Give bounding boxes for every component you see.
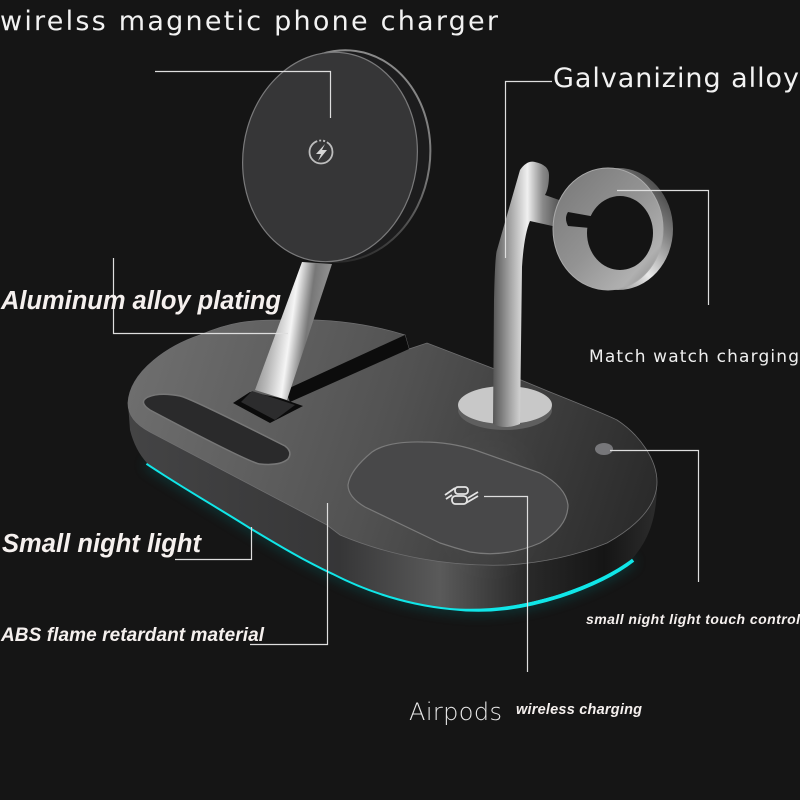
label: airpods: Airpods xyxy=(409,698,502,726)
label: small night light: Small night light xyxy=(2,530,202,558)
base side wall xyxy=(128,400,657,609)
night light strip xyxy=(147,463,633,610)
label: touch control: small night light touch control xyxy=(586,611,800,627)
wireless charging pad xyxy=(348,442,568,554)
icon: earbuds xyxy=(445,487,478,504)
watch post base xyxy=(458,390,552,430)
leader lines xyxy=(114,72,708,672)
phone charger disc edge xyxy=(238,39,444,273)
night light glow xyxy=(147,463,633,610)
night light pad xyxy=(143,394,290,464)
title: wirelss magnetic phone charger xyxy=(0,6,499,37)
label: abs flame retardant material: ABS flame retardant material xyxy=(0,625,265,646)
label: aluminum alloy plating: Aluminum alloy plating xyxy=(0,287,281,315)
watch ring xyxy=(553,168,673,290)
watch post xyxy=(493,162,562,427)
icon: lightning xyxy=(310,140,332,164)
label: galvanizing alloy: Galvanizing alloy xyxy=(553,63,799,94)
phone arm hinge xyxy=(233,392,303,423)
label: wireless charging: wireless charging xyxy=(516,702,642,718)
label: match watch charging: Match watch charging xyxy=(589,347,799,367)
phone arm xyxy=(255,262,332,400)
phone charger disc face xyxy=(229,41,431,273)
hinge slot xyxy=(285,335,409,402)
base top surface xyxy=(128,320,657,565)
product: charging stand xyxy=(128,39,673,610)
surface highlight xyxy=(465,455,515,555)
icon: touch control xyxy=(595,443,613,455)
